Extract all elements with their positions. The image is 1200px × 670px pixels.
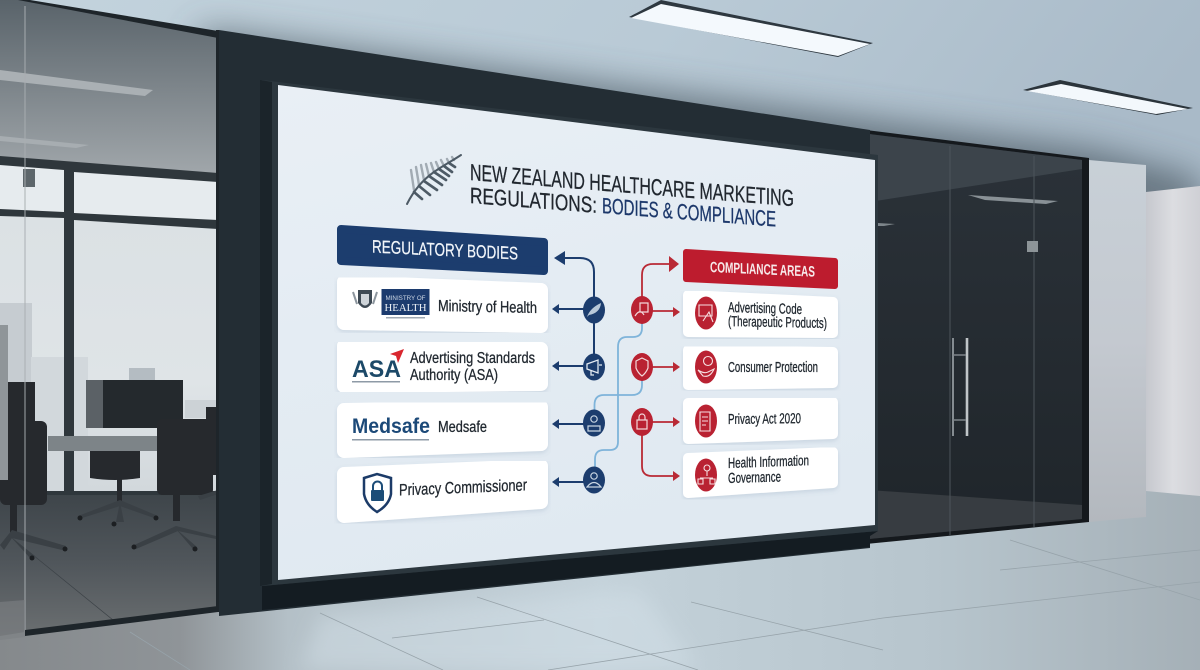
connectors: navy arrows to regulatory bodies (552, 251, 594, 487)
ceiling (0, 0, 1200, 300)
card: consumer protection (688, 350, 833, 385)
glass edge highlight (24, 6, 26, 632)
heading: regulatory bodies: REGULATORY BODIES (372, 237, 518, 264)
icon: padlock node (631, 408, 653, 436)
icon nodes: regulatory bodies (583, 296, 605, 494)
meeting table (48, 436, 160, 451)
card: medsafe (344, 407, 541, 451)
panel: compliance areas (686, 252, 835, 493)
card: health information governance (688, 452, 833, 493)
icon: consumer protection (695, 350, 717, 384)
door hinge reflection (23, 169, 35, 187)
icon: silver fern (407, 155, 461, 204)
icon: person node (583, 466, 605, 494)
display housing (260, 80, 878, 610)
logo: ASA: ASA (352, 356, 401, 383)
logo: medsafe: Medsafe (352, 414, 430, 438)
card: advertising code: Advertising Code (728, 300, 802, 318)
card: ministry of health (344, 282, 541, 326)
icon: privacy act (695, 404, 717, 438)
logo: health wordmark (382, 289, 430, 318)
icon: fern node (583, 296, 605, 324)
card: advertising standards authority (344, 346, 541, 386)
display screen (278, 85, 875, 580)
card: advertising standards authority: Advertising Standards (410, 350, 535, 367)
logo: privacy shield (364, 474, 391, 512)
infographic content (341, 155, 835, 516)
title block (407, 155, 794, 232)
card: health information governance: Health Information (728, 453, 809, 472)
icon: megaphone node (583, 354, 605, 380)
right wall (1146, 186, 1200, 496)
card: privacy commissioner: Privacy Commissioner (399, 476, 527, 499)
title line 2: REGULATIONS: (470, 183, 597, 218)
dark feature wall (219, 30, 870, 616)
monitor (86, 380, 183, 428)
card: privacy act 2020 (688, 402, 833, 439)
glass partition and meeting room (0, 0, 218, 640)
connectors: red arrows to compliance areas (642, 256, 680, 481)
card: advertising code: (Therapeutic Products) (728, 314, 827, 332)
card: privacy commissioner (344, 466, 541, 516)
title accent: BODIES & COMPLIANCE (602, 193, 776, 232)
card: advertising standards authority: Authority (ASA) (410, 367, 498, 384)
heading: compliance areas: COMPLIANCE AREAS (710, 259, 815, 281)
title line 1: NEW ZEALAND HEALTHCARE MARKETING (470, 159, 794, 211)
icon: people node (583, 410, 605, 436)
logo: health wordmark: MINISTRY OF (386, 295, 426, 302)
icon: advertising code (695, 296, 717, 330)
panel: regulatory bodies (341, 229, 544, 516)
icon nodes: compliance (631, 296, 653, 436)
logo: health wordmark: HEALTH (384, 303, 427, 314)
door hinge (1027, 241, 1038, 252)
chairs (0, 382, 218, 560)
ceiling light left (629, 0, 873, 57)
logo: ministry of health crest (353, 290, 377, 308)
glass doors (866, 130, 1089, 544)
card: consumer protection: Consumer Protection (728, 360, 818, 376)
window frame and city view (0, 156, 218, 495)
floor (0, 480, 1200, 670)
card: advertising code (688, 295, 833, 333)
column (1089, 160, 1146, 522)
icon: health information governance (695, 458, 717, 492)
card: medsafe: Medsafe (438, 419, 487, 436)
card: ministry of health: Ministry of Health (438, 298, 537, 317)
icon: shield node (631, 353, 653, 381)
icon: documents node (631, 296, 653, 324)
ceiling light right (1023, 80, 1193, 115)
partition frame (18, 0, 219, 636)
heading: compliance areas (686, 252, 835, 286)
door handle (953, 338, 967, 436)
connectors: light blue cross links (594, 322, 642, 470)
heading: regulatory bodies (341, 229, 544, 271)
card: privacy act 2020: Privacy Act 2020 (728, 411, 801, 428)
card: health information governance: Governance (728, 469, 781, 487)
